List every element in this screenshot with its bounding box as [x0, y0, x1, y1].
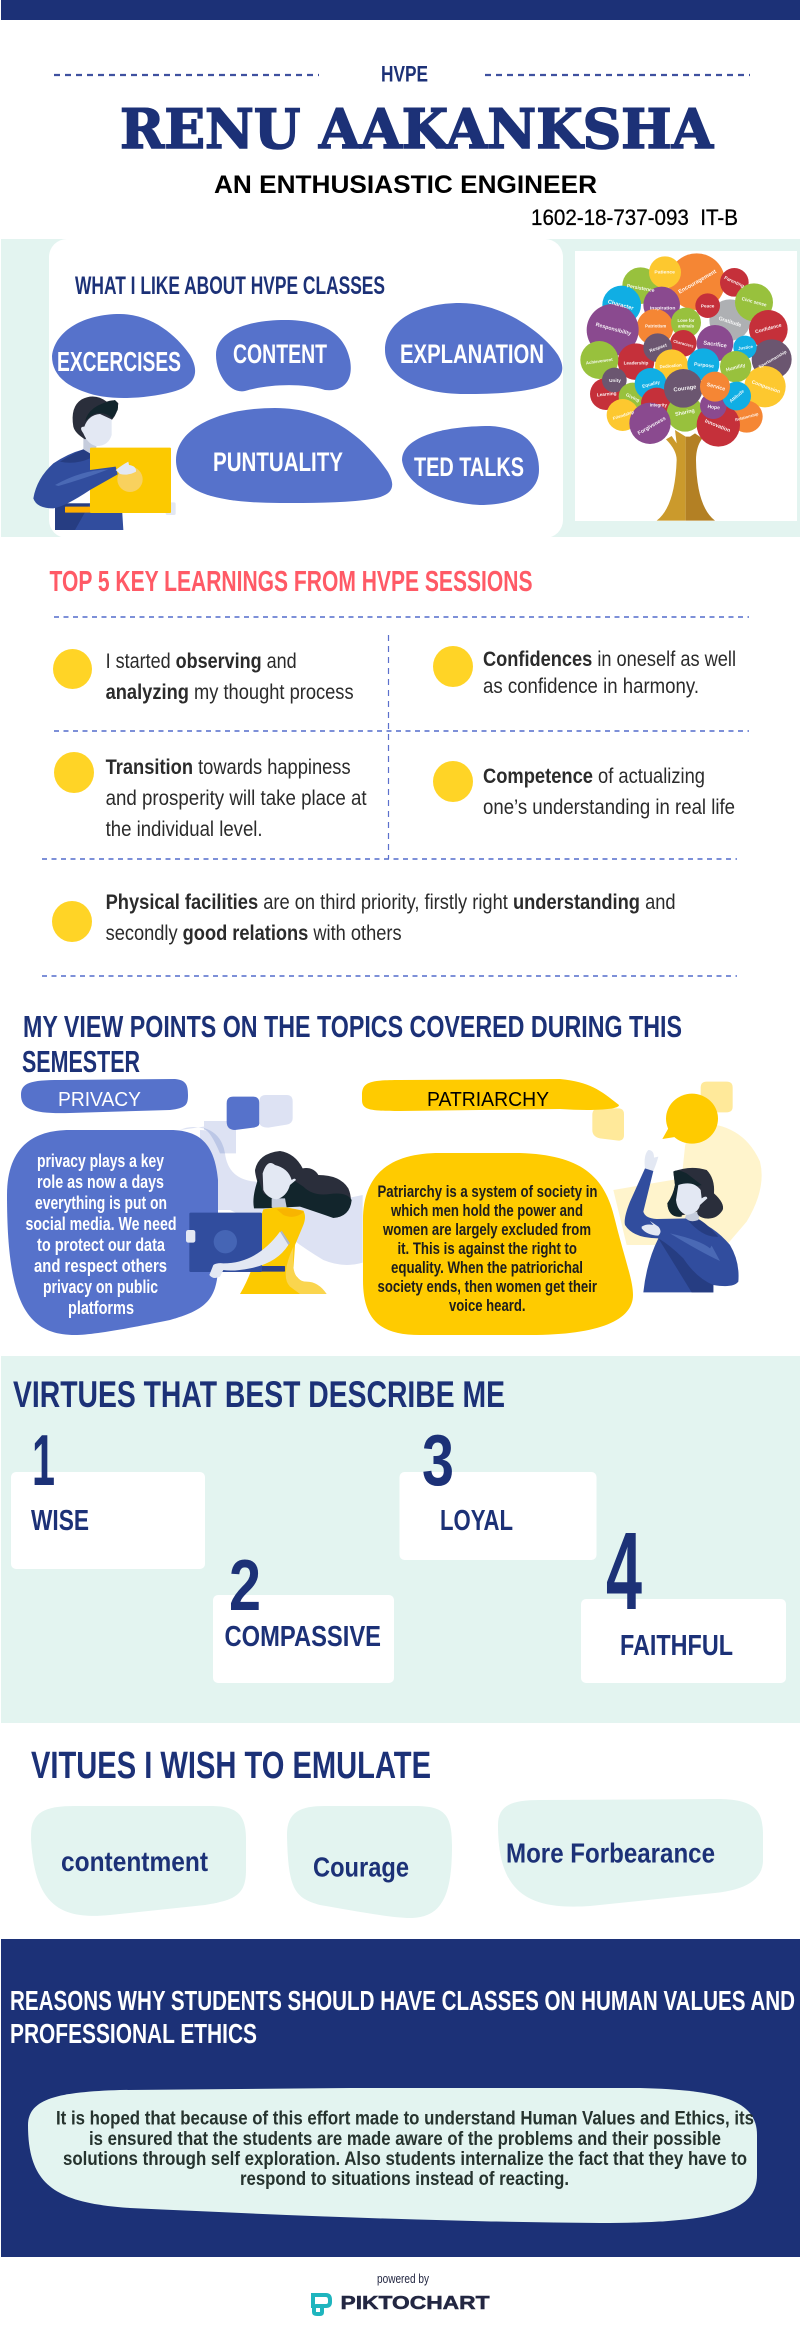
- tree word labels: Respect: [649, 342, 668, 353]
- tree word labels: Peace: [701, 304, 715, 309]
- blob: ted talks: TED TALKS: [414, 452, 524, 482]
- card: patriarchy text: it. This is against the right to: [398, 1240, 577, 1258]
- learning 5: secondly good relations with others: [106, 922, 402, 945]
- card: patriarchy text: women are largely excluded from: [382, 1221, 591, 1239]
- tree word labels: Responsibility: [595, 322, 632, 337]
- card: privacy text: and respect others: [34, 1256, 167, 1276]
- learning 5: [52, 891, 676, 945]
- tree word labels: Encouragement: [678, 269, 718, 296]
- footer: piktochart branding: PIKTOCHART: [340, 2292, 490, 2313]
- tree word labels: Service: [706, 382, 726, 393]
- tree word labels: Compassion: [751, 379, 781, 395]
- tree word labels: Sharing: [675, 408, 695, 418]
- learning 2: Confidences in oneself as well: [483, 648, 736, 671]
- heading: emulate: VITUES I WISH TO EMULATE: [31, 1745, 431, 1787]
- tree word labels: Equality: [642, 379, 661, 389]
- tree word labels: Dedication: [659, 362, 682, 369]
- tree word labels: animals: [678, 324, 695, 329]
- tree word labels: Characters: [673, 338, 695, 349]
- heading: reasons: [10, 1985, 795, 2049]
- learning 3: the individual level.: [106, 818, 263, 841]
- tree word labels: Love for: [677, 318, 695, 323]
- blob: excercises: [52, 314, 195, 398]
- tree word labels: Unity: [609, 378, 621, 383]
- tree word labels: Sportsmanship: [758, 349, 788, 369]
- blob: forbearance: More Forbearance: [506, 1838, 715, 1868]
- panel: top 5 key learnings: [42, 566, 749, 976]
- footer: piktochart branding: powered by: [377, 2272, 430, 2286]
- learning 4: one’s understanding in real life: [483, 796, 735, 819]
- blob: contentment: [31, 1806, 246, 1916]
- tree word labels: Persistence: [626, 283, 655, 294]
- card: loyal: LOYAL: [440, 1505, 513, 1537]
- learning 4: [433, 761, 735, 819]
- heading: key learnings: TOP 5 KEY LEARNINGS FROM HVPE SESSIONS: [50, 566, 532, 598]
- tab: patriarchy: [362, 1079, 619, 1111]
- tab: patriarchy: PATRIARCHY: [427, 1089, 549, 1111]
- blob: forbearance: [498, 1799, 763, 1907]
- tree word labels: Friendship: [612, 409, 635, 421]
- card: privacy text: everything is put on: [35, 1193, 167, 1213]
- learning 2: [433, 646, 736, 698]
- card: privacy text: privacy plays a key: [37, 1151, 164, 1171]
- card: privacy text: [7, 1130, 218, 1335]
- card: loyal: [400, 1421, 596, 1560]
- tree word labels: Giving: [625, 392, 640, 403]
- roll number: 1602-18-737-093 IT-B: [531, 205, 738, 230]
- card: privacy text: privacy on public: [43, 1277, 158, 1297]
- card: compassive: 2: [229, 1546, 261, 1626]
- tree word labels: Character: [607, 299, 635, 312]
- blob: content: [216, 320, 351, 391]
- header: [54, 62, 750, 230]
- illustration: woman with laptop: [186, 1151, 352, 1294]
- tree word labels: Attitude: [728, 388, 745, 404]
- illustration: woman with speech bubble background: [592, 1082, 762, 1245]
- tree word labels: Relationship: [735, 411, 759, 422]
- tree word labels: Innovation: [704, 418, 731, 434]
- learning 1: analyzing my thought process: [106, 681, 354, 704]
- illustration: word tree: [575, 251, 797, 521]
- top bar: [1, 0, 800, 20]
- tree word labels: Courage: [673, 384, 697, 394]
- learning 1: I started observing and: [106, 650, 297, 673]
- card: patriarchy text: voice heard.: [449, 1297, 526, 1315]
- learning 1: [53, 649, 354, 704]
- tree word labels: Sacrifice: [703, 340, 727, 350]
- tree word labels: Gratitude: [718, 316, 742, 329]
- tree word labels: Integrity: [650, 403, 667, 408]
- card: wise: WISE: [31, 1505, 89, 1537]
- callout: reasons text: is ensured that the students are made aware of the problems and their possible: [89, 2129, 721, 2150]
- title: name: RENU AAKANKSHA: [120, 97, 714, 161]
- panel: virtues that describe me: [1, 1356, 800, 1723]
- blob: courage: Courage: [313, 1852, 409, 1882]
- card: loyal: 3: [422, 1421, 454, 1501]
- card: privacy text: platforms: [68, 1298, 134, 1318]
- card: patriarchy text: [363, 1153, 633, 1335]
- tree word labels: Justice: [738, 344, 754, 351]
- tree word labels: Learning: [597, 391, 617, 398]
- blob: excercises: EXCERCISES: [57, 346, 181, 377]
- learning 2: as confidence in harmony.: [483, 675, 699, 698]
- tree word labels: Humility: [725, 362, 746, 373]
- footer: piktochart branding: [313, 2272, 490, 2314]
- blob: puntuality: [176, 408, 392, 503]
- subtitle: AN ENTHUSIASTIC ENGINEER: [214, 171, 597, 199]
- learning 4: Competence of actualizing: [483, 765, 705, 788]
- card: privacy text: social media. We need: [26, 1214, 176, 1234]
- learning 3: Transition towards happiness: [106, 756, 351, 779]
- panel: view points: [7, 1009, 762, 1335]
- illustration: man holding board: [33, 396, 176, 530]
- tree trunk: [657, 430, 715, 521]
- card: faithful: [581, 1510, 786, 1683]
- tree word labels: Civic sense: [741, 296, 768, 308]
- learning 3: and prosperity will take place at: [106, 787, 367, 810]
- card: patriarchy text: equality. When the patriorichal: [391, 1259, 583, 1277]
- tree word labels: Leadership: [624, 361, 649, 366]
- blob: puntuality: PUNTUALITY: [213, 447, 343, 477]
- heading: what I like: WHAT I LIKE ABOUT HVPE CLASSES: [75, 272, 385, 300]
- illustration: woman with speech bubble: [625, 1094, 739, 1292]
- card: compassive: COMPASSIVE: [224, 1621, 381, 1653]
- blob: explanation: [385, 303, 562, 394]
- blob: explanation: EXPLANATION: [400, 339, 544, 369]
- callout: reasons text: [28, 2088, 757, 2223]
- tree word labels: Confidence: [755, 323, 783, 335]
- heading: reasons: PROFESSIONAL ETHICS: [10, 2018, 257, 2049]
- tab: privacy: PRIVACY: [58, 1089, 141, 1111]
- illustration: woman with laptop background: [180, 1095, 363, 1265]
- learning 5: Physical facilities are on third priority, firstly right understanding and: [106, 891, 676, 914]
- card: faithful: FAITHFUL: [620, 1630, 733, 1662]
- card: patriarchy text: which men hold the power and: [390, 1202, 583, 1220]
- tree word labels: Purpose: [694, 362, 714, 370]
- blob: courage: [287, 1806, 452, 1918]
- learning 3: [54, 752, 367, 841]
- label: HVPE: HVPE: [381, 62, 428, 86]
- card: privacy text: role as now a days: [37, 1172, 164, 1192]
- heading: view points: [22, 1009, 682, 1079]
- tree word labels: Hope: [707, 404, 720, 411]
- card: wise: 1: [32, 1421, 55, 1501]
- heading: virtues: VIRTUES THAT BEST DESCRIBE ME: [13, 1374, 505, 1415]
- card: privacy text: to protect our data: [37, 1235, 166, 1255]
- blob: contentment: contentment: [61, 1846, 208, 1877]
- tree word labels: Inspiration: [650, 305, 675, 311]
- tree word labels: [586, 269, 788, 437]
- panel: virtues to emulate: [31, 1745, 763, 1918]
- tree word labels: Forgiveness: [637, 416, 667, 437]
- card: faithful: 4: [606, 1510, 642, 1633]
- card: patriarchy text: Patriarchy is a system of society in: [378, 1183, 598, 1201]
- icon: piktochart logo: [313, 2295, 330, 2314]
- panel: reasons: [1, 1939, 800, 2257]
- tree word labels: Parenting: [723, 275, 745, 289]
- callout: reasons text: respond to situations instead of reacting.: [240, 2169, 569, 2190]
- tab: privacy: [21, 1079, 188, 1113]
- tree word labels: Patience: [654, 270, 675, 276]
- panel: what I like band: [1, 239, 800, 538]
- card: patriarchy text: society ends, then women get their: [378, 1278, 597, 1296]
- blob: ted talks: [402, 426, 539, 505]
- card: compassive: [213, 1546, 394, 1683]
- tree word labels: Achievement: [586, 357, 613, 366]
- blob: content: CONTENT: [233, 339, 327, 369]
- tree word labels: Patriotism: [645, 323, 666, 328]
- card: wise: [11, 1421, 205, 1569]
- heading: view points: SEMESTER: [22, 1044, 140, 1079]
